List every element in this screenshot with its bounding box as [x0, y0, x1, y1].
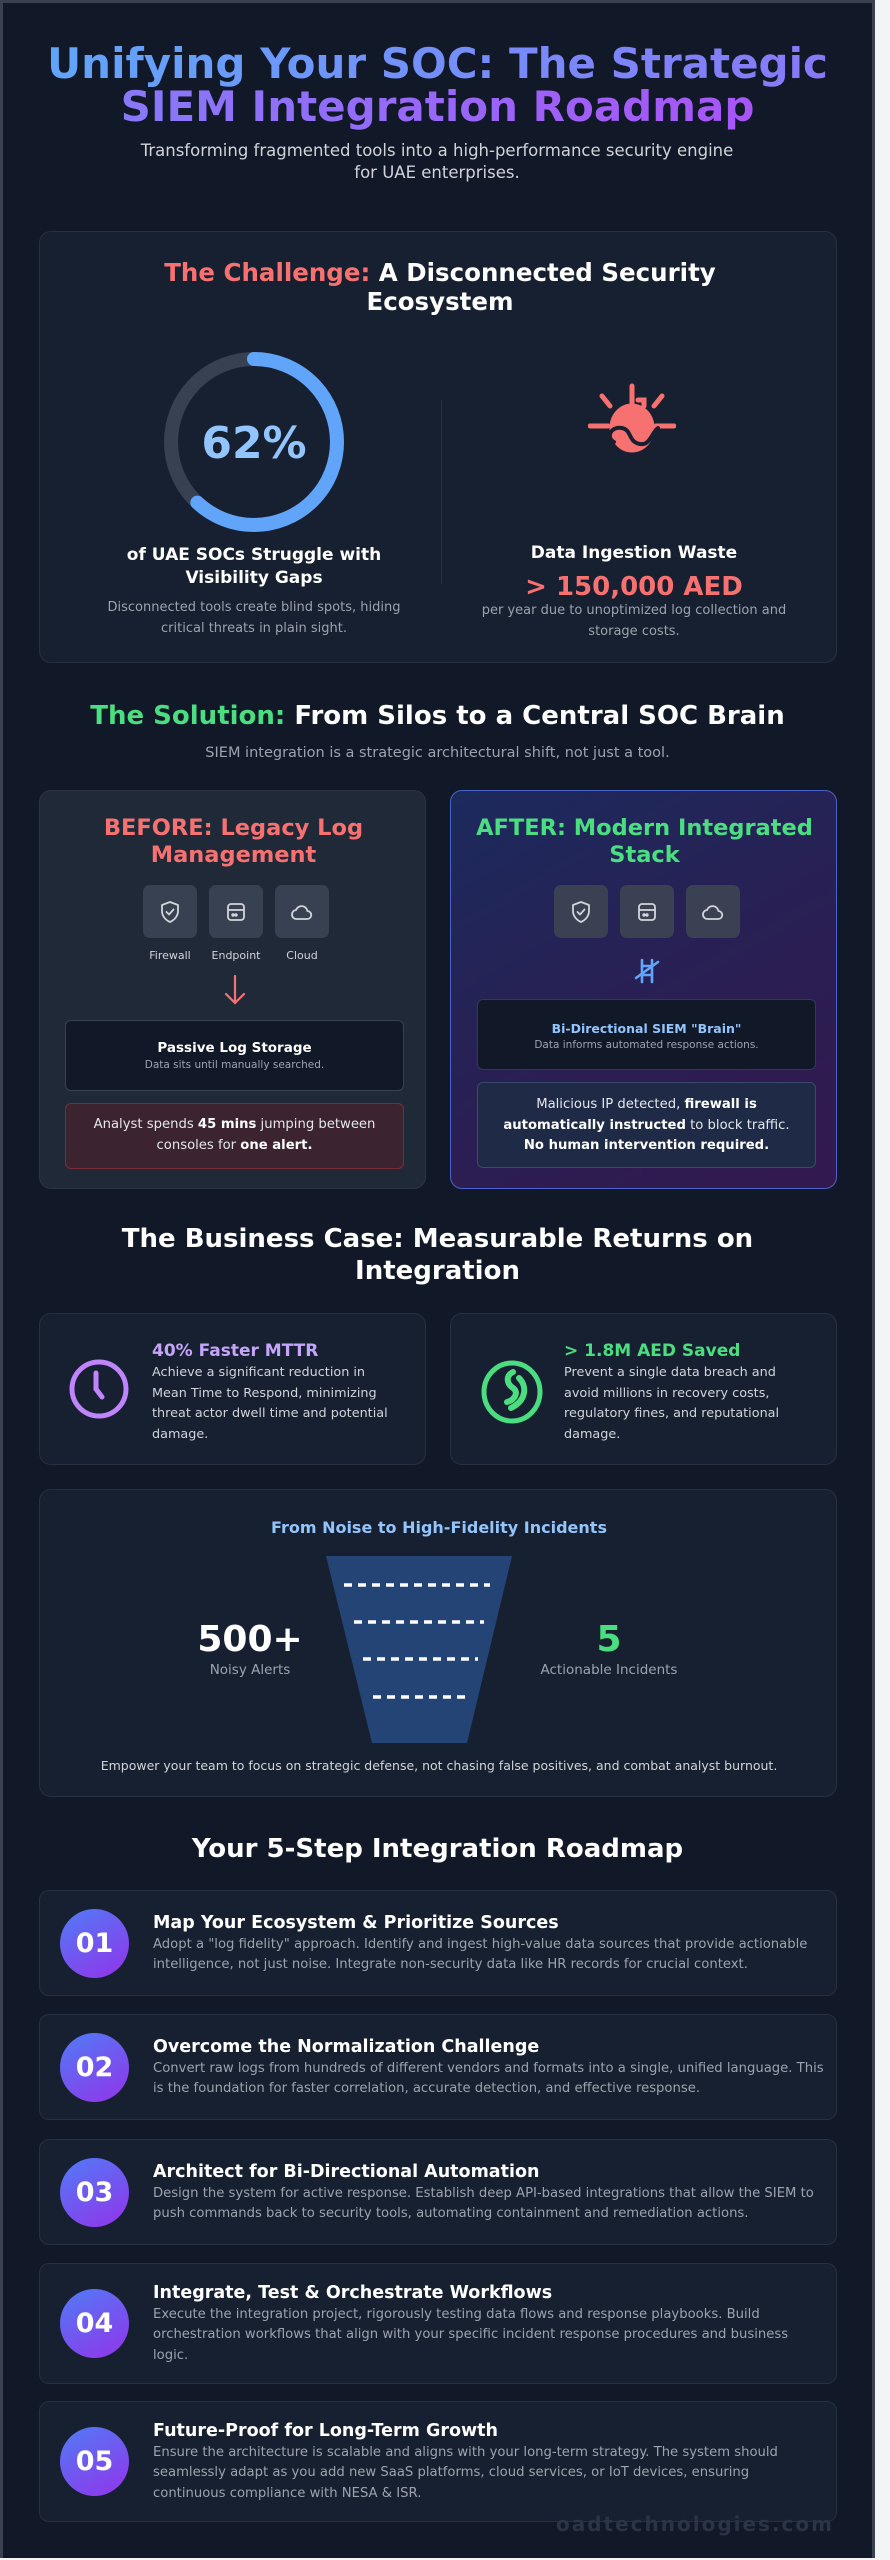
- ring chart 62%: 62%: [201, 418, 307, 469]
- roadmap heading: Your 5-Step Integration Roadmap: [192, 1834, 683, 1864]
- stat label: of UAE SOCs Struggle with Visibility Gaps: [127, 545, 381, 588]
- step 2: Overcome the Normalization Challenge: [153, 2036, 539, 2056]
- icon: endpoint: [620, 885, 674, 938]
- waste value: > 150,000 AED: [525, 572, 743, 602]
- solution subtitle: SIEM integration is a strategic architectural shift, not just a tool.: [205, 745, 670, 761]
- step 3: 03: [76, 2176, 113, 2208]
- stat description: Disconnected tools create blind spots, hiding critical threats in plain sight.: [108, 600, 400, 636]
- waste description: per year due to unoptimized log collection and storage costs.: [482, 603, 786, 639]
- siem brain box: Bi-Directional SIEM "Brain": [552, 1021, 741, 1036]
- siem brain box: [477, 999, 816, 1070]
- source icons: Cloud: [286, 949, 318, 962]
- step 5: Future-Proof for Long-Term Growth: [153, 2421, 498, 2441]
- icon: savings: [482, 1360, 542, 1424]
- source icons: [143, 885, 329, 962]
- automation callout: [477, 1082, 816, 1168]
- funnel title: From Noise to High-Fidelity Incidents: [271, 1518, 607, 1537]
- actionable incidents stat: [540, 1619, 677, 1678]
- step 2: Convert raw logs from hundreds of different vendors and formats into a single, unified language. This is the foundation for faster correlation, accurate detection, and effective response.: [153, 2060, 824, 2096]
- siem brain box: Data informs automated response actions.: [534, 1039, 759, 1051]
- panel: before: [39, 790, 426, 1189]
- waste label: Data Ingestion Waste: [531, 543, 737, 563]
- step 4: 04: [76, 2308, 113, 2339]
- icon: cloud: [275, 885, 329, 938]
- actionable incidents stat: 5: [596, 1619, 622, 1660]
- after heading: AFTER: Modern Integrated Stack: [476, 815, 813, 868]
- panel: after: [450, 790, 837, 1189]
- step 3: Architect for Bi-Directional Automation: [153, 2162, 539, 2182]
- MTTR text: Achieve a significant reduction in Mean Time to Respond, minimizing threat actor dwell time and potential damage.: [152, 1365, 388, 1442]
- noisy alerts stat: [197, 1619, 303, 1678]
- savings text: Prevent a single data breach and avoid millions in recovery costs, regulatory fines, and reputational damage.: [564, 1365, 779, 1442]
- card: savings: [450, 1313, 837, 1465]
- connected source icons: [554, 885, 740, 938]
- noisy alerts stat: Noisy Alerts: [210, 1662, 290, 1678]
- icon: firewall: [143, 885, 197, 938]
- step 3: Design the system for active response. Establish deep API-based integrations that allow the SIEM to push commands back to security tools, automating containment and remediation actions.: [153, 2186, 814, 2221]
- ring chart 62%: [164, 352, 344, 532]
- source icons: Firewall: [149, 949, 191, 962]
- passive log storage: [65, 1020, 404, 1091]
- panel: challenge: [39, 231, 837, 663]
- step 1: 01: [76, 1928, 113, 1958]
- step 5: Ensure the architecture is scalable and aligns with your long-term strategy. The system should seamlessly adapt as you add new SaaS platforms, cloud services, or IoT devices, ensuring continuous compliance with NESA & ISR.: [153, 2445, 778, 2501]
- step 5: [39, 2401, 837, 2522]
- arrow down: [224, 974, 246, 1004]
- icon: endpoint: [209, 885, 263, 938]
- step 5: 05: [76, 2446, 113, 2477]
- step 1: Map Your Ecosystem & Prioritize Sources: [153, 1912, 559, 1932]
- source icons: Endpoint: [212, 949, 260, 962]
- card: MTTR: [39, 1313, 426, 1465]
- challenge heading: The Challenge: A Disconnected Security Ecosystem: [164, 258, 716, 316]
- icon: bug: [588, 384, 676, 452]
- icon: bi-directional link: [634, 958, 660, 984]
- funnel caption: Empower your team to focus on strategic defense, not chasing false positives, and combat analyst burnout.: [101, 1758, 777, 1773]
- step 2: [39, 2014, 837, 2120]
- before heading: BEFORE: Legacy Log Management: [104, 815, 363, 868]
- step 2: 02: [76, 2052, 113, 2082]
- noisy alerts stat: 500+: [197, 1619, 303, 1660]
- step 4: [39, 2263, 837, 2384]
- icon: clock: [70, 1360, 128, 1418]
- automation callout: Malicious IP detected, firewall is automatically instructed to block traffic. No human intervention required.: [503, 1097, 790, 1153]
- watermark: oadtechnologies.com: [556, 2512, 834, 2536]
- step 1: [39, 1890, 837, 1996]
- passive log storage: Passive Log Storage: [157, 1040, 312, 1056]
- passive log storage: Data sits until manually searched.: [145, 1059, 324, 1071]
- step 4: Execute the integration project, rigorously testing data flows and response playbooks. Build orchestration workflows that align with your specific incident response procedures and business logic.: [153, 2307, 788, 2363]
- funnel chart: [326, 1556, 512, 1743]
- subtitle: Transforming fragmented tools into a high-performance security engine for UAE enterprises.: [141, 141, 733, 182]
- icon: firewall: [554, 885, 608, 938]
- icon: cloud: [686, 885, 740, 938]
- panel: funnel: [39, 1489, 837, 1797]
- actionable incidents stat: Actionable Incidents: [541, 1662, 677, 1678]
- step 1: Adopt a "log fidelity" approach. Identify and ingest high-value data sources that provide actionable intelligence, not just noise. Integrate non-security data like HR records for crucial context.: [153, 1936, 807, 1972]
- title: Unifying Your SOC: The Strategic SIEM Integration Roadmap: [47, 39, 828, 131]
- savings title: > 1.8M AED Saved: [564, 1341, 740, 1361]
- step 3: [39, 2139, 837, 2245]
- divider: [441, 400, 442, 584]
- step 4: Integrate, Test & Orchestrate Workflows: [153, 2283, 552, 2303]
- MTTR title: 40% Faster MTTR: [152, 1341, 318, 1361]
- analyst callout: Analyst spends 45 mins jumping between consoles for one alert.: [94, 1117, 375, 1152]
- business case heading: The Business Case: Measurable Returns on Integration: [122, 1224, 753, 1286]
- solution heading: The Solution: From Silos to a Central SOC Brain: [90, 701, 785, 731]
- analyst callout: [65, 1103, 404, 1169]
